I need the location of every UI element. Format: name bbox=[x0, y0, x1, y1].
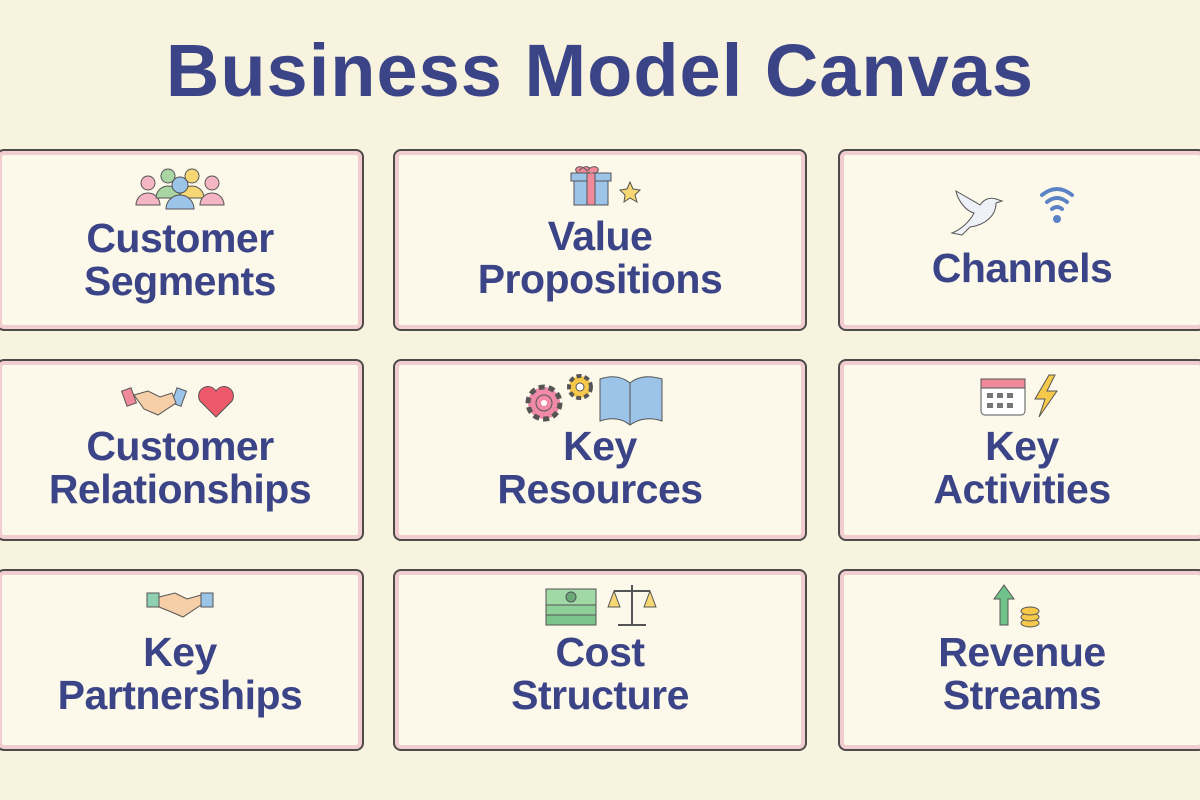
panel: key resources bbox=[393, 359, 807, 541]
icon: money and scale bbox=[546, 585, 657, 626]
panel: revenue streams: Revenue bbox=[938, 629, 1106, 675]
panel: value propositions bbox=[393, 149, 807, 331]
panel: channels: Channels bbox=[932, 245, 1112, 291]
panel: cost structure: Cost bbox=[555, 629, 645, 675]
panel: cost structure: Structure bbox=[511, 672, 689, 718]
panel: value propositions: Propositions bbox=[478, 256, 722, 302]
icon: arrow and coins bbox=[993, 584, 1040, 628]
panel: channels bbox=[838, 149, 1200, 331]
panel: revenue streams bbox=[838, 569, 1200, 751]
panel: key partnerships: Key bbox=[143, 629, 217, 675]
icon: calendar and bolt bbox=[980, 374, 1058, 418]
panel: key resources: Resources bbox=[497, 466, 703, 512]
panel: key activities: Activities bbox=[933, 466, 1111, 512]
panel: customer relationships: Customer bbox=[86, 423, 274, 469]
panel: key activities bbox=[838, 359, 1200, 541]
panel: customer relationships bbox=[0, 359, 364, 541]
panel: key resources: Key bbox=[563, 423, 637, 469]
panel: key activities: Key bbox=[985, 423, 1059, 469]
panel: customer segments: Customer bbox=[86, 215, 274, 261]
panel: value propositions: Value bbox=[548, 213, 652, 259]
panel: revenue streams: Streams bbox=[943, 672, 1101, 718]
icon: dove and wifi bbox=[950, 187, 1074, 236]
icon: gears and book bbox=[526, 374, 662, 426]
panel: key partnerships: Partnerships bbox=[58, 672, 302, 718]
icon: gift and star bbox=[570, 166, 641, 206]
panel: customer segments: Segments bbox=[84, 258, 276, 304]
icon: handshake and heart bbox=[121, 386, 234, 418]
panel: key partnerships bbox=[0, 569, 364, 751]
icon: handshake bbox=[146, 592, 214, 618]
title: Business Model Canvas bbox=[166, 29, 1034, 112]
icon: people group bbox=[136, 168, 224, 210]
panel: customer segments bbox=[0, 149, 364, 331]
panel: customer relationships: Relationships bbox=[49, 466, 311, 512]
panel: cost structure bbox=[393, 569, 807, 751]
